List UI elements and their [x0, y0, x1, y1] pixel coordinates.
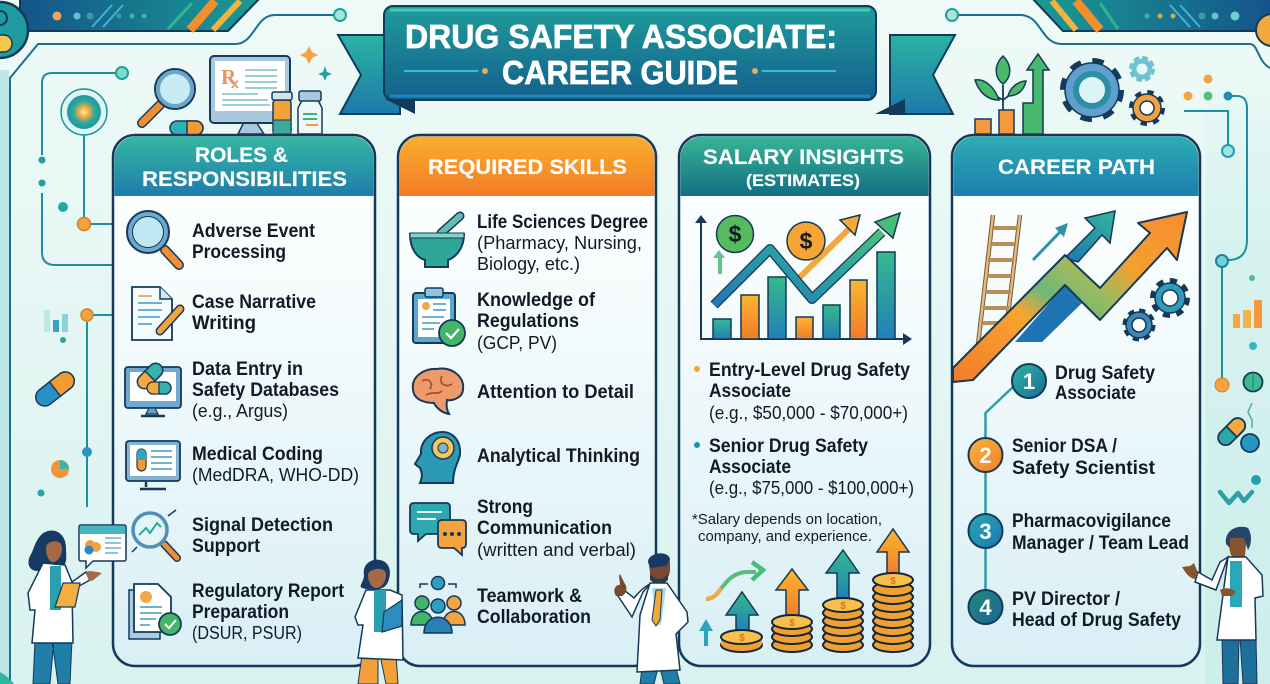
- panel: career path: [952, 135, 1200, 666]
- bottle white: [298, 100, 322, 134]
- senior salary: Associate: [709, 457, 791, 478]
- senior salary: [694, 436, 914, 498]
- heading: [142, 144, 347, 191]
- stack 1: [721, 630, 762, 652]
- salary chart: [695, 213, 912, 345]
- coin stacks with arrows: [699, 529, 913, 652]
- item: data entry in safety databases: [125, 359, 339, 421]
- item: adverse event processing: Adverse Event: [192, 221, 316, 242]
- item: regulatory report preparation: (DSUR, PSUR): [192, 623, 302, 643]
- item: knowledge of regulations: (GCP, PV): [477, 333, 557, 353]
- heading: SALARY INSIGHTS: [703, 146, 904, 169]
- item: strong communication: [410, 497, 636, 560]
- monitor with Rx: [238, 122, 264, 134]
- salary chart: $: [729, 221, 742, 247]
- step 3: Manager / Team Lead: [1012, 533, 1189, 554]
- heading: ROLES &: [195, 144, 288, 167]
- connector path: [986, 386, 1014, 590]
- top right icons: growth: [975, 54, 1162, 134]
- item: attention to detail: [413, 368, 634, 414]
- ribbon right tail: [890, 35, 955, 114]
- step 4: PV Director /: [1012, 589, 1121, 610]
- coin marks: $: [890, 576, 896, 587]
- item: strong communication: Communication: [477, 518, 612, 539]
- salary footnote: company, and experience.: [698, 528, 872, 545]
- step 3: Pharmacovigilance: [1012, 511, 1171, 532]
- frame circuit: left: [10, 15, 334, 684]
- heading: RESPONSIBILITIES: [142, 168, 347, 191]
- step 2: Senior DSA /: [1012, 436, 1118, 457]
- item: adverse event processing: Processing: [192, 242, 286, 263]
- capsule: [170, 121, 203, 135]
- item: data entry in safety databases: (e.g., Argus): [192, 401, 288, 421]
- title ribbon: [338, 6, 955, 114]
- item: attention to detail: Attention to Detail: [477, 382, 634, 403]
- heading: [703, 146, 904, 190]
- rising line: [714, 232, 882, 305]
- top right banner: [1032, 0, 1270, 31]
- person: man right: [1182, 527, 1263, 684]
- item: teamwork and collaboration: [411, 576, 591, 633]
- item: strong communication: (written and verbal): [477, 540, 636, 560]
- large gear: [1064, 62, 1120, 118]
- right side decorations: [1184, 74, 1262, 503]
- item: knowledge of regulations: Knowledge of: [477, 290, 596, 311]
- coin marks: $: [739, 633, 745, 644]
- item: knowledge of regulations: [413, 288, 596, 353]
- top left icons: review tools: x: [231, 75, 239, 91]
- item: adverse event processing: [127, 211, 316, 265]
- entry level salary: (e.g., $50,000 - $70,000+): [709, 403, 908, 423]
- item: life sciences degree: [410, 212, 648, 274]
- item: teamwork and collaboration: Collaboration: [477, 607, 591, 628]
- small teal arrow: [1033, 223, 1068, 260]
- step 1: 1: [1023, 369, 1035, 394]
- item: regulatory report preparation: Preparation: [192, 602, 289, 623]
- step 4: 4: [979, 595, 992, 620]
- item: signal detection support: Signal Detection: [192, 515, 333, 536]
- item: data entry in safety databases: Safety Databases: [192, 380, 339, 401]
- heading: (ESTIMATES): [746, 171, 860, 190]
- orange coin: [787, 222, 825, 260]
- title line 2: CAREER GUIDE: [502, 55, 738, 92]
- item: life sciences degree: Biology, etc.): [477, 254, 580, 274]
- item: regulatory report preparation: Regulatory Report: [192, 581, 345, 602]
- orange gear: [1132, 93, 1162, 123]
- panel: roles and responsibilities: [113, 135, 375, 666]
- item: analytical thinking: Analytical Thinking: [477, 446, 640, 467]
- orange career arrow: [953, 212, 1187, 382]
- bottle orange: [273, 100, 291, 134]
- item: data entry in safety databases: Data Entry in: [192, 359, 303, 380]
- blue lower arrow band: [1015, 284, 1082, 342]
- item: medical coding: Medical Coding: [192, 444, 323, 465]
- step 1: Drug Safety: [1055, 363, 1155, 384]
- salary footnote: *Salary depends on location,: [692, 511, 882, 528]
- stack 2: [772, 615, 812, 652]
- person: woman with tablet: [355, 560, 403, 684]
- entry level salary: Associate: [709, 381, 791, 402]
- stack 3: [823, 598, 863, 652]
- coin marks: [739, 576, 896, 644]
- green coin: [716, 216, 754, 252]
- top left emblem: [0, 2, 28, 58]
- title line 1: DRUG SAFETY ASSOCIATE:: [405, 19, 837, 56]
- stack 4: [873, 573, 913, 652]
- item: life sciences degree: (Pharmacy, Nursing,: [477, 233, 642, 253]
- entry level salary: [694, 360, 910, 423]
- node: top right: [946, 9, 958, 21]
- salary chart: $: [800, 228, 813, 254]
- person: woman presenting, left: [28, 530, 102, 684]
- coin marks: $: [840, 601, 846, 612]
- item: strong communication: Strong: [477, 497, 533, 518]
- step 2: 2: [979, 443, 992, 468]
- entry level salary: Entry-Level Drug Safety: [709, 360, 910, 381]
- orange arrow: [800, 228, 850, 277]
- top right emblem: [1256, 14, 1270, 46]
- top left banner: [20, 0, 260, 31]
- left side decorations: [32, 67, 128, 507]
- small light gear: [1132, 59, 1152, 79]
- speech bubble: presentation: [79, 525, 126, 568]
- title plate: [384, 6, 876, 100]
- step 1: [1012, 363, 1155, 404]
- item: case narrative writing: Case Narrative: [192, 292, 316, 313]
- senior salary: (e.g., $75,000 - $100,000+): [709, 478, 914, 498]
- career gears: [1125, 281, 1187, 339]
- frame circuit: right: [958, 15, 1270, 68]
- step 3: 3: [979, 519, 992, 544]
- item: signal detection support: Support: [192, 536, 261, 557]
- corner accent bottom left: [0, 672, 14, 684]
- item: medical coding: (MedDRA, WHO-DD): [192, 465, 359, 485]
- sparkles: [300, 46, 318, 64]
- plant: [985, 85, 1014, 110]
- senior salary: Senior Drug Safety: [709, 436, 868, 457]
- salary footnote: [692, 511, 882, 545]
- item: signal detection support: [132, 510, 333, 558]
- growth bars: [975, 119, 991, 134]
- item: medical coding: [126, 441, 359, 489]
- heading: CAREER PATH: [998, 156, 1155, 179]
- person: man pointing: [614, 553, 688, 684]
- heading: REQUIRED SKILLS: [428, 156, 627, 179]
- item: knowledge of regulations: Regulations: [477, 311, 579, 332]
- step 3: [968, 511, 1189, 554]
- step 4: Head of Drug Safety: [1012, 610, 1181, 631]
- right edge strip: [1205, 60, 1270, 684]
- step 1: Associate: [1055, 383, 1136, 404]
- panel: required skills: [398, 135, 656, 666]
- item: case narrative writing: Writing: [192, 313, 256, 334]
- item: regulatory report preparation: [129, 581, 345, 643]
- green stepped arrow: [1023, 54, 1049, 134]
- item: life sciences degree: Life Sciences Degree: [477, 212, 648, 233]
- green up arrow: [713, 250, 725, 274]
- item: teamwork and collaboration: Teamwork &: [477, 586, 582, 607]
- ribbon left tail: [338, 35, 400, 114]
- magnifier: [142, 105, 160, 123]
- coin marks: $: [789, 618, 795, 629]
- top left icons: review tools: [142, 46, 332, 135]
- step 2: [968, 436, 1156, 479]
- blue career arrow: [1065, 211, 1115, 262]
- panel: salary insights: [679, 135, 930, 666]
- step 4: [968, 589, 1181, 631]
- item: case narrative writing: [132, 287, 316, 340]
- top left icons: review tools: R: [221, 65, 237, 89]
- item: analytical thinking: [415, 432, 640, 483]
- career ladder: [978, 215, 1020, 345]
- step 2: Safety Scientist: [1012, 458, 1156, 479]
- node: top left: [334, 9, 346, 21]
- left edge strip: [0, 70, 9, 684]
